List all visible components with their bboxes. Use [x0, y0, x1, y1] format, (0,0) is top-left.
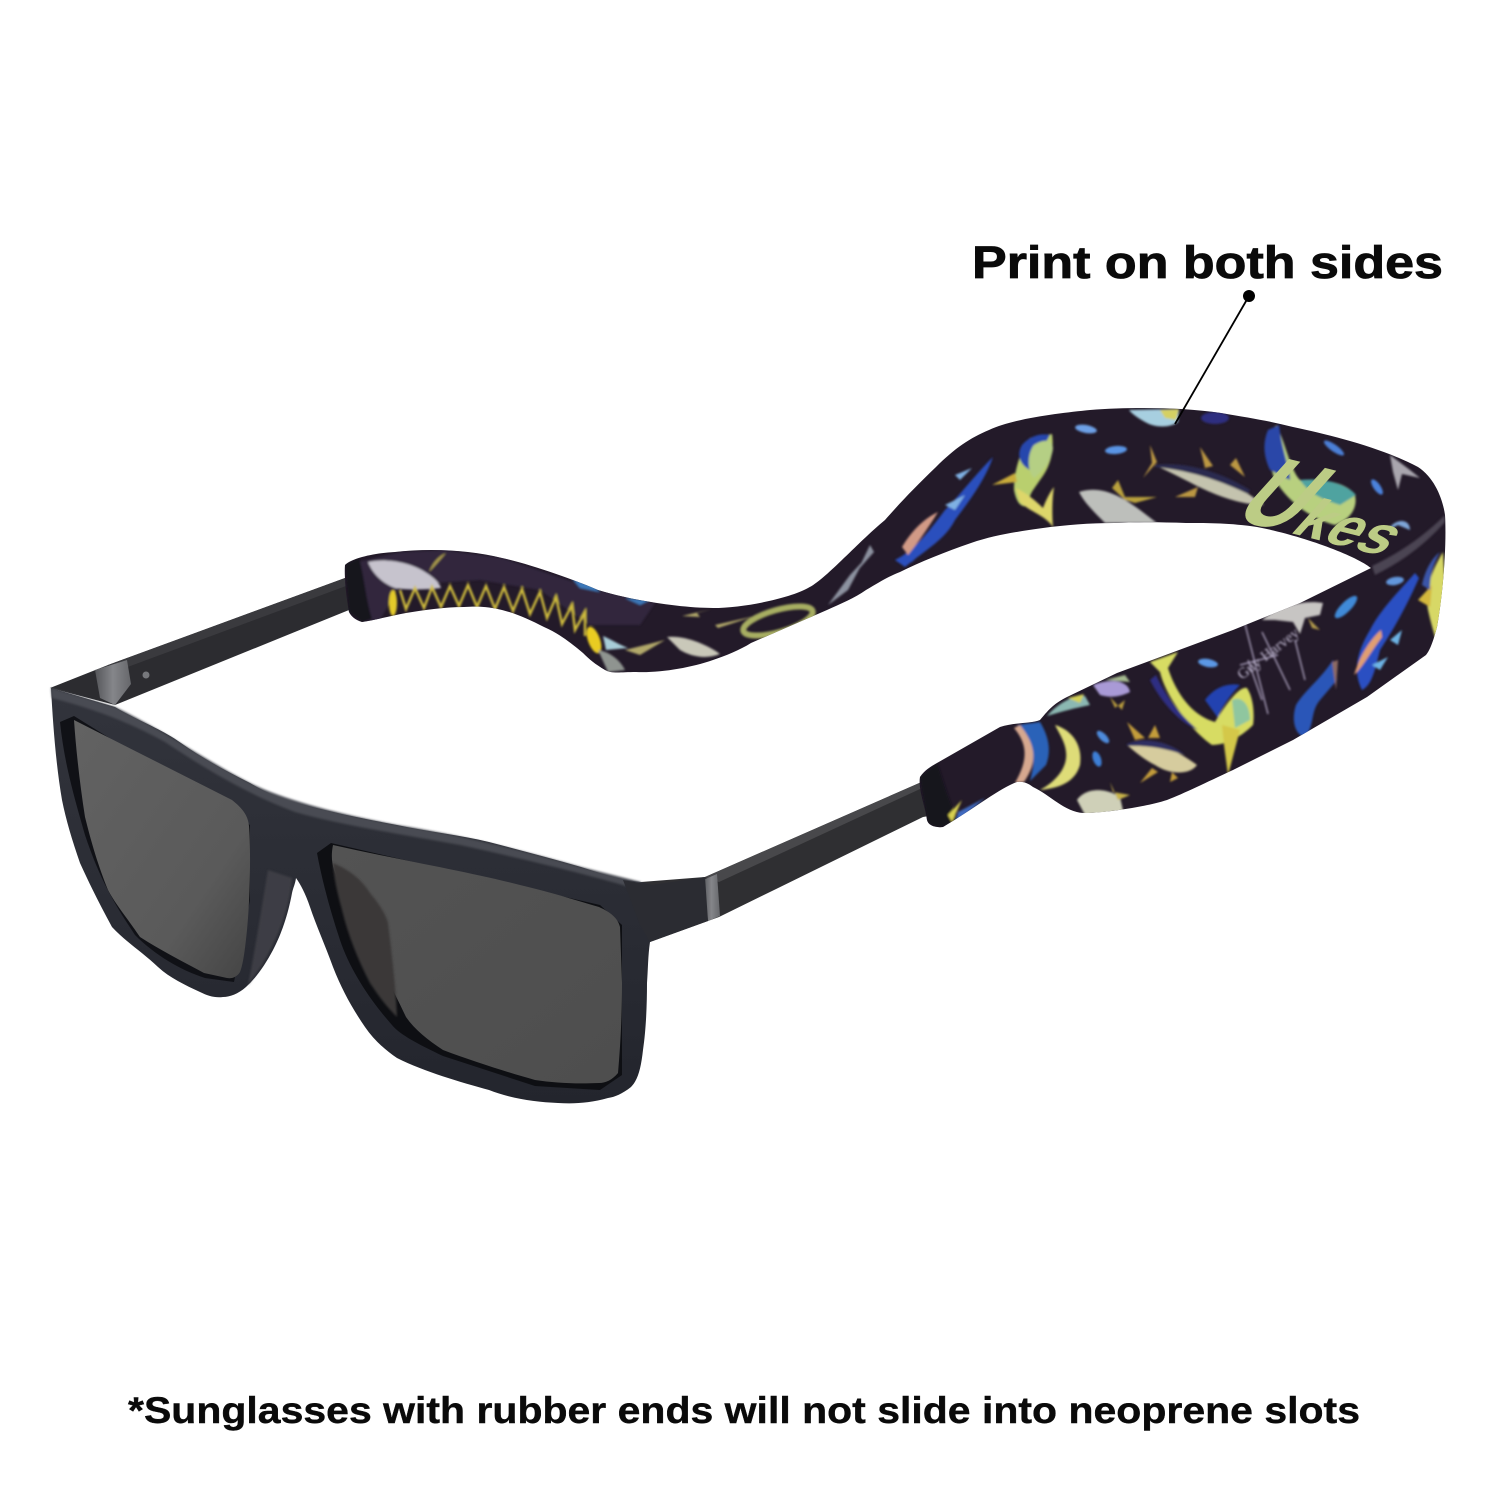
strap left end tube — [345, 550, 655, 625]
seam grey bend — [1372, 515, 1445, 575]
right lens nose-side reflection — [333, 863, 397, 1017]
hinge end piece — [623, 877, 708, 942]
blue marlin lower band — [1294, 660, 1337, 737]
signature text: Guy Harvey — [1235, 625, 1303, 683]
white fish lower band — [1262, 602, 1323, 634]
right marlin — [1357, 573, 1419, 690]
tuna silver lower — [1079, 490, 1157, 523]
white fish inner left — [368, 560, 441, 590]
small tuna centre — [667, 637, 720, 657]
fin lines centre — [625, 609, 755, 655]
left cut end — [345, 558, 372, 622]
yellow stitching — [400, 585, 585, 636]
footnote: *Sunglasses with rubber ends will not slide into neoprene slots — [128, 1390, 1360, 1431]
grey fish — [598, 650, 625, 672]
sunglasses front frame — [51, 688, 708, 1103]
tuna lower band — [1127, 742, 1197, 772]
near end cut — [920, 763, 958, 827]
left lens rim — [60, 716, 250, 982]
near temple arm — [641, 777, 935, 942]
infographic canvas — [50, 244, 1446, 1431]
big mahi lower band — [1150, 652, 1254, 745]
purple fish — [1093, 681, 1130, 697]
left lens — [74, 720, 250, 978]
frame body — [51, 688, 656, 1103]
small blue fish upper — [1074, 423, 1098, 435]
blue and tan stripe near end — [1017, 722, 1049, 781]
blue accents mid — [570, 576, 650, 605]
bottom tuna — [1077, 790, 1124, 815]
pale blue patch — [603, 636, 628, 650]
yellow crescent left — [429, 553, 446, 572]
top fish — [1129, 409, 1179, 426]
navy fish top — [1201, 412, 1229, 424]
callout text: Print on both sides — [972, 237, 1443, 288]
far temple arm — [50, 578, 349, 705]
printed logo: U — [1213, 439, 1358, 551]
strap base — [345, 408, 1445, 827]
right lens — [332, 845, 622, 1083]
near end accent — [955, 798, 985, 825]
blue marlin upper left — [895, 457, 993, 567]
grey marks — [828, 545, 874, 605]
callout leader line — [1175, 290, 1255, 424]
nose pad highlight — [248, 870, 292, 985]
right lens rim — [317, 843, 622, 1090]
mahi behind logo — [1271, 425, 1356, 525]
right yellow mahi edge — [1427, 552, 1446, 640]
pale fish beside logo — [1388, 521, 1410, 530]
yellow crescent lower — [1040, 725, 1080, 790]
teal fish — [1047, 696, 1090, 716]
neoprene strap — [345, 408, 1453, 827]
stitch end right — [585, 624, 603, 655]
white marks right bend — [1390, 455, 1420, 490]
frame top highlight — [51, 688, 641, 890]
tuna silver upper — [1155, 465, 1264, 505]
printed logo: kes — [1278, 489, 1421, 567]
printed logo — [1213, 439, 1453, 575]
stitch end left — [389, 590, 397, 616]
strap printed fish artwork — [345, 409, 1446, 827]
mahi upper — [1014, 434, 1053, 506]
signature strokes — [1240, 624, 1305, 714]
green loop — [740, 601, 816, 641]
band marlin middle — [904, 525, 948, 563]
small blue fish lower — [1197, 657, 1219, 669]
